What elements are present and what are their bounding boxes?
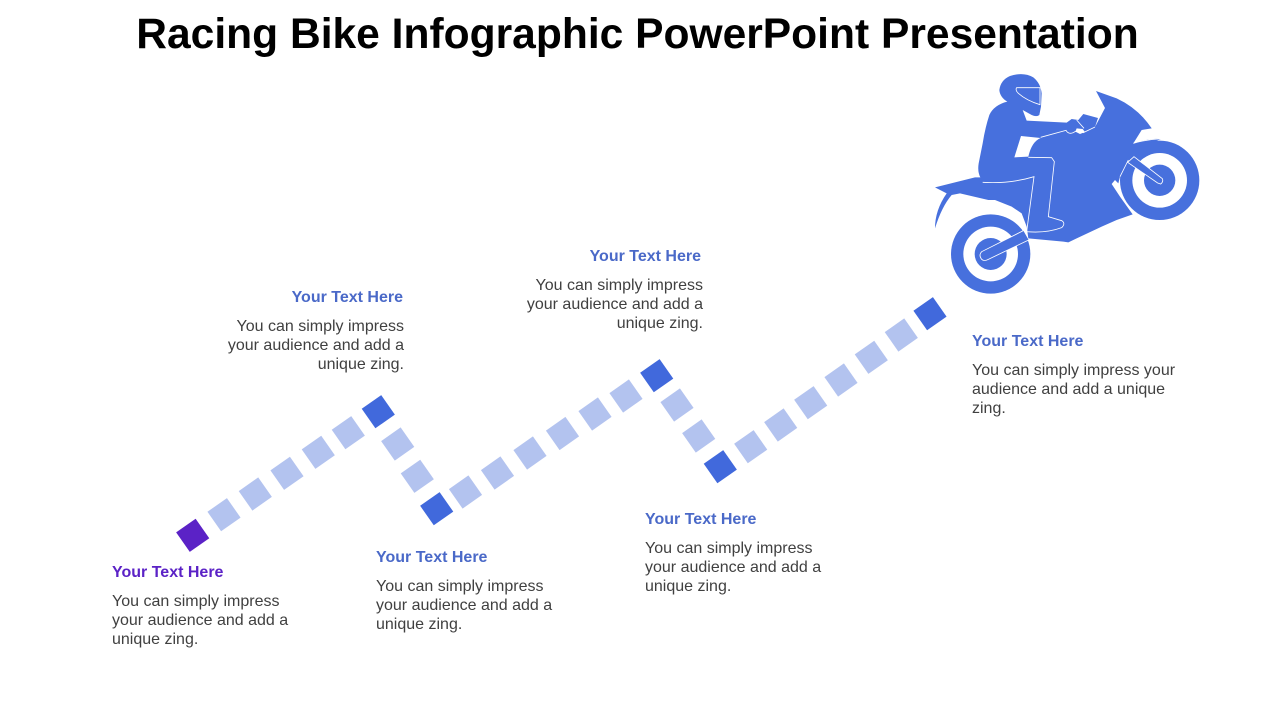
text block 6: zing.: [972, 400, 1006, 417]
text block 1: Your Text Here: [112, 564, 223, 581]
gap between arm and leg: [1014, 136, 1041, 157]
title: Racing Bike Infographic PowerPoint Presentation: [136, 10, 1139, 58]
rider outline details: [983, 88, 1162, 232]
text block 4: You can simply impress: [536, 277, 703, 294]
text block 4: Your Text Here: [590, 248, 701, 265]
text block 2: You can simply impress: [237, 318, 404, 335]
text block 6: audience and add a unique: [972, 381, 1165, 398]
text block 6: Your Text Here: [972, 333, 1083, 350]
text block 5: your audience and add a: [645, 559, 821, 576]
text block 3: Your Text Here: [376, 549, 487, 566]
text block 5: You can simply impress: [645, 540, 812, 557]
text block 4: [527, 248, 704, 332]
text block 1: You can simply impress: [112, 593, 279, 610]
text block 3: your audience and add a: [376, 597, 552, 614]
text block 1: [112, 564, 288, 648]
rear wheel: [951, 214, 1030, 294]
front wheel: [1120, 141, 1199, 220]
text block 4: unique zing.: [617, 315, 703, 332]
text block 6: [972, 333, 1175, 417]
milestone marker squares: [362, 297, 947, 525]
text block 1: unique zing.: [112, 631, 198, 648]
text block 2: [228, 289, 404, 373]
text block 3: You can simply impress: [376, 578, 543, 595]
hand highlight: [1075, 128, 1085, 134]
front fork: [1128, 157, 1163, 184]
start marker square: [176, 519, 209, 552]
text block 6: You can simply impress your: [972, 362, 1175, 379]
text block 3: [376, 549, 552, 633]
text block 2: your audience and add a: [228, 337, 404, 354]
light path squares: [207, 318, 918, 531]
text block 1: your audience and add a: [112, 612, 288, 629]
text block 3: unique zing.: [376, 616, 462, 633]
text block 5: [645, 511, 822, 595]
text block 5: Your Text Here: [645, 511, 756, 528]
text block 5: unique zing.: [645, 578, 731, 595]
text block 2: unique zing.: [318, 356, 404, 373]
text block 4: your audience and add a: [527, 296, 703, 313]
icon: racing motorbike with rider: [935, 74, 1199, 294]
swing arm: [980, 231, 1029, 260]
text block 2: Your Text Here: [292, 289, 403, 306]
